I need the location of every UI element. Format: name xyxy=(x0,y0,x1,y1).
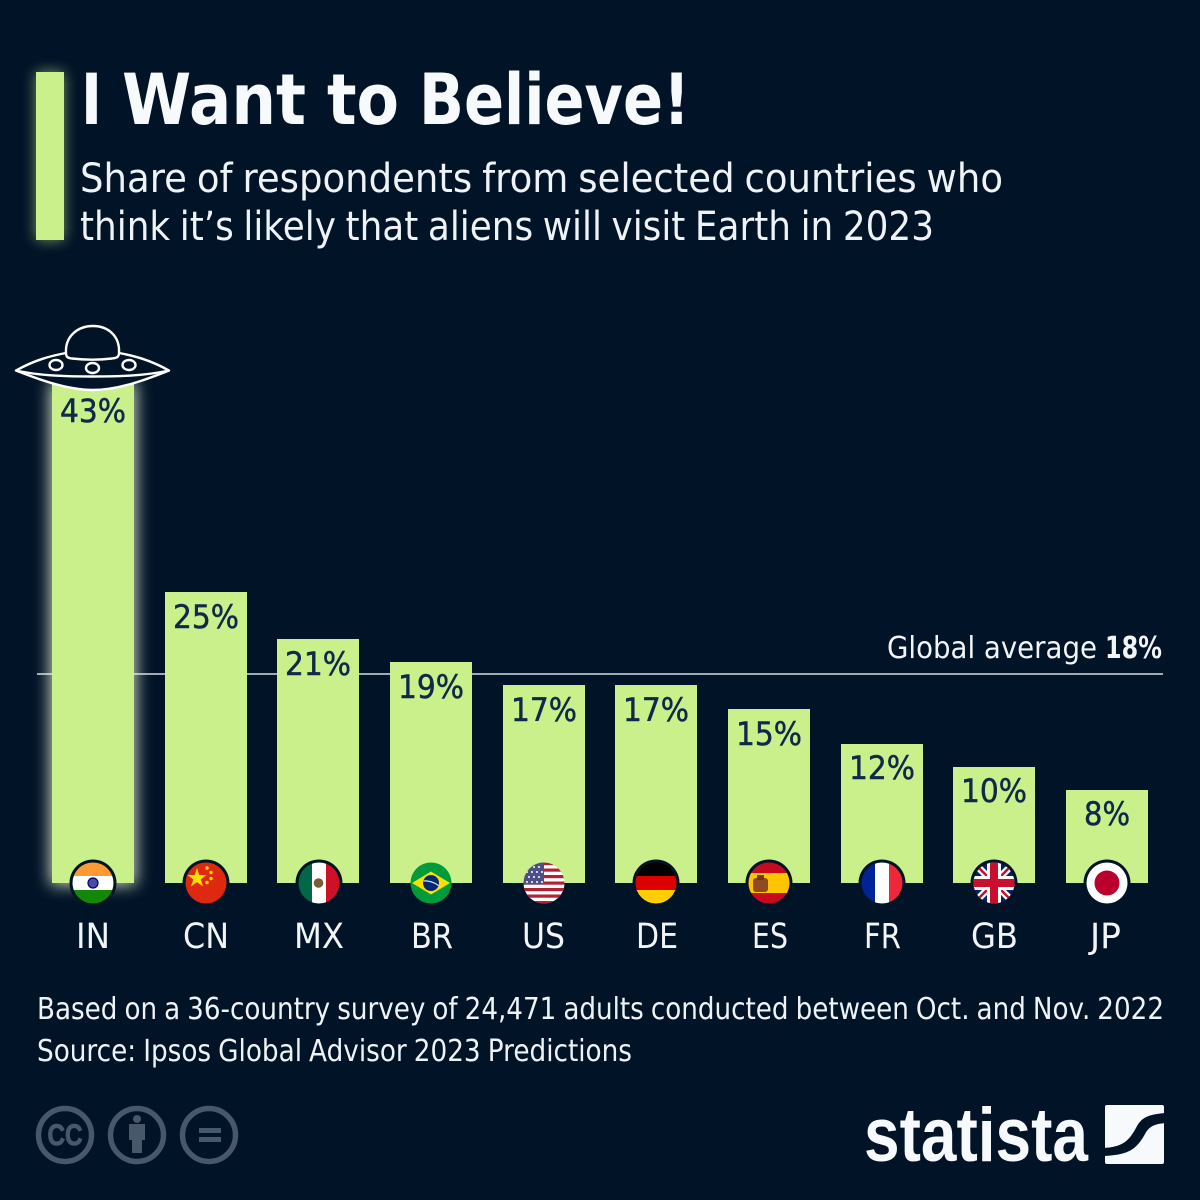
statista wordmark: statista xyxy=(864,1093,1089,1178)
country labels: IN xyxy=(76,917,110,957)
icon: no derivatives xyxy=(182,1108,236,1162)
flag: France xyxy=(858,860,906,906)
bar: United States 17% xyxy=(503,685,585,883)
flag: United Kingdom xyxy=(970,860,1018,906)
icon: creative commons xyxy=(38,1108,92,1162)
country labels: CN xyxy=(183,917,229,957)
bar: China 25%: 25% xyxy=(173,598,239,636)
country labels xyxy=(76,917,1121,957)
country labels: DE xyxy=(636,917,678,957)
subtitle xyxy=(80,156,1003,250)
country labels: US xyxy=(522,917,565,957)
global average line xyxy=(37,673,1163,675)
title: Want xyxy=(122,59,306,141)
bar: China 25% xyxy=(165,592,247,883)
title: to xyxy=(327,59,399,141)
bar: United Kingdom 10% xyxy=(953,767,1035,883)
bar: Mexico 21% xyxy=(277,639,359,883)
bar: Brazil 19% xyxy=(390,662,472,883)
footnote and source: Source: Ipsos Global Advisor 2023 Predictions xyxy=(37,1034,632,1069)
title: I xyxy=(81,59,102,141)
bar: France 12% xyxy=(841,744,923,883)
statista logo mark xyxy=(1103,1105,1166,1164)
country labels: GB xyxy=(971,917,1018,957)
flag: Brazil xyxy=(410,862,452,904)
bar: Mexico 21%: 21% xyxy=(285,645,351,683)
country labels: FR xyxy=(864,917,901,957)
bar chart xyxy=(50,382,1148,885)
flag: Germany xyxy=(632,860,680,906)
bar: Spain 15%: 15% xyxy=(736,715,802,753)
bar: Spain 15% xyxy=(728,709,810,883)
flag: China xyxy=(182,860,230,906)
bar: India 43%: 43% xyxy=(60,392,126,430)
flag: India xyxy=(70,860,116,906)
flag: Spain xyxy=(746,860,792,906)
bar: Brazil 19%: 19% xyxy=(398,668,464,706)
subtitle: think it’s likely that aliens will visit Earth in 2023 xyxy=(80,204,934,250)
bar: Germany 17% xyxy=(615,685,697,883)
subtitle: Share of respondents from selected countries who xyxy=(80,156,1003,202)
footnote and source xyxy=(37,992,1164,1069)
icon: attribution xyxy=(110,1108,164,1162)
country labels: BR xyxy=(411,917,453,957)
bar: France 12%: 12% xyxy=(849,749,915,787)
bar: Japan 8%: 8% xyxy=(1084,795,1130,833)
flag: Mexico xyxy=(296,860,342,906)
global average label: Global average xyxy=(887,631,1097,666)
bar: United Kingdom 10%: 10% xyxy=(961,772,1027,810)
icon: creative commons: CC xyxy=(48,1119,82,1152)
bar: United States 17%: 17% xyxy=(511,691,577,729)
bar: Germany 17%: 17% xyxy=(623,691,689,729)
flag: Japan xyxy=(1084,860,1130,906)
flag: United States xyxy=(523,862,565,904)
title accent bar xyxy=(36,72,64,240)
country labels: MX xyxy=(294,917,344,957)
country labels: ES xyxy=(752,917,788,957)
country labels: JP xyxy=(1088,917,1121,957)
title xyxy=(81,59,690,141)
global average label: 18% xyxy=(1105,631,1162,666)
icon: flying saucer xyxy=(16,326,169,390)
bar: India 43% xyxy=(50,382,136,885)
title: Believe! xyxy=(419,59,690,141)
bar: Japan 8% xyxy=(1066,790,1148,883)
